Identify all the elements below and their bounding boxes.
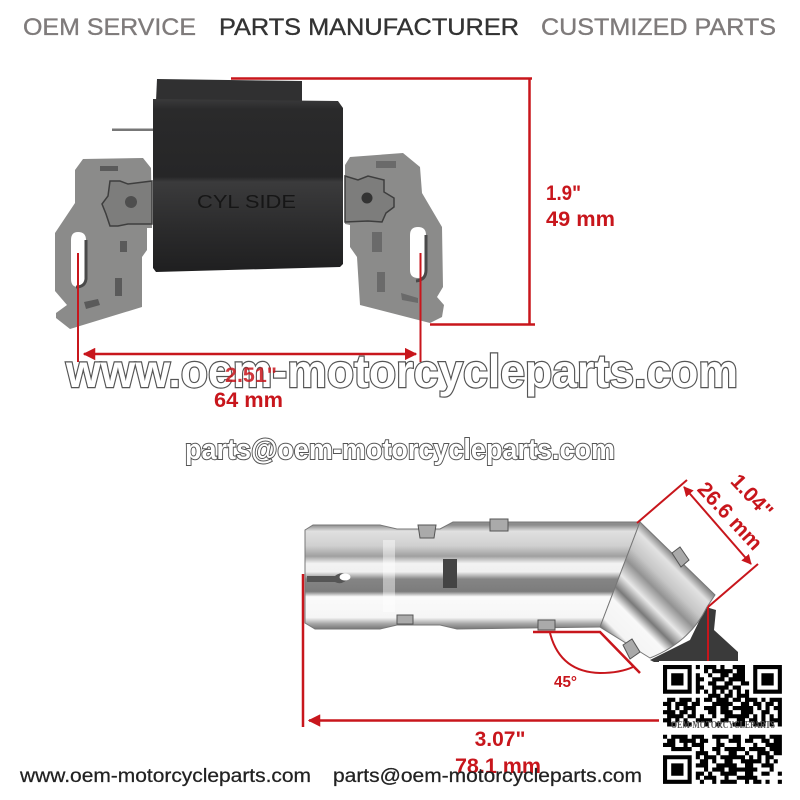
boot slot — [307, 573, 350, 583]
boot width text inches: 1.04" — [726, 470, 777, 523]
boot width dimension — [637, 470, 777, 662]
header: customized parts: CUSTMIZED PARTS — [541, 14, 776, 41]
boot shaded ring — [443, 559, 457, 588]
coil pin — [112, 128, 153, 131]
height text inches: 1.9" — [546, 182, 581, 205]
header: parts manufacturer: PARTS MANUFACTURER — [219, 14, 519, 41]
spark plug boot photo — [305, 519, 738, 662]
boot clips — [397, 519, 689, 659]
coil rear block — [156, 79, 302, 101]
QR code — [659, 661, 786, 788]
length text mm: 78.1 mm — [455, 754, 541, 778]
ignition coil photo — [55, 79, 444, 329]
coil stamped label: CYL SIDE — [197, 192, 296, 212]
coil width dimension — [78, 253, 420, 362]
boot length dimension — [303, 574, 660, 778]
boot hole — [340, 574, 350, 580]
height text mm: 49 mm — [546, 208, 615, 231]
footer website: www.oem-motorcycleparts.com — [19, 766, 311, 787]
angle text: 45° — [554, 674, 577, 691]
coil width text inches: 2.51" — [225, 364, 277, 387]
large website watermark: www.oem-motorcycleparts.com — [65, 345, 738, 397]
boot straight section — [305, 522, 640, 629]
boot black end piece — [650, 607, 738, 662]
boot bend section — [600, 522, 715, 658]
coil height dimension — [231, 78, 615, 324]
boot width text mm: 26.6 mm — [693, 478, 767, 555]
coil width text mm: 64 mm — [214, 389, 283, 412]
QR brand band text: OEM-MOTORCYCLEPARTS — [671, 720, 775, 731]
boot highlight band — [383, 540, 395, 612]
coil main body — [153, 99, 343, 272]
footer email: parts@oem-motorcycleparts.com — [333, 766, 642, 787]
header: OEM service: OEM SERVICE — [23, 14, 196, 41]
bend angle marker — [533, 632, 640, 691]
left mounting bracket — [55, 158, 152, 329]
email watermark: parts@oem-motorcycleparts.com — [185, 434, 615, 466]
right mounting bracket — [345, 153, 444, 323]
header navigation text — [23, 14, 776, 41]
length text inches: 3.07" — [475, 728, 525, 751]
